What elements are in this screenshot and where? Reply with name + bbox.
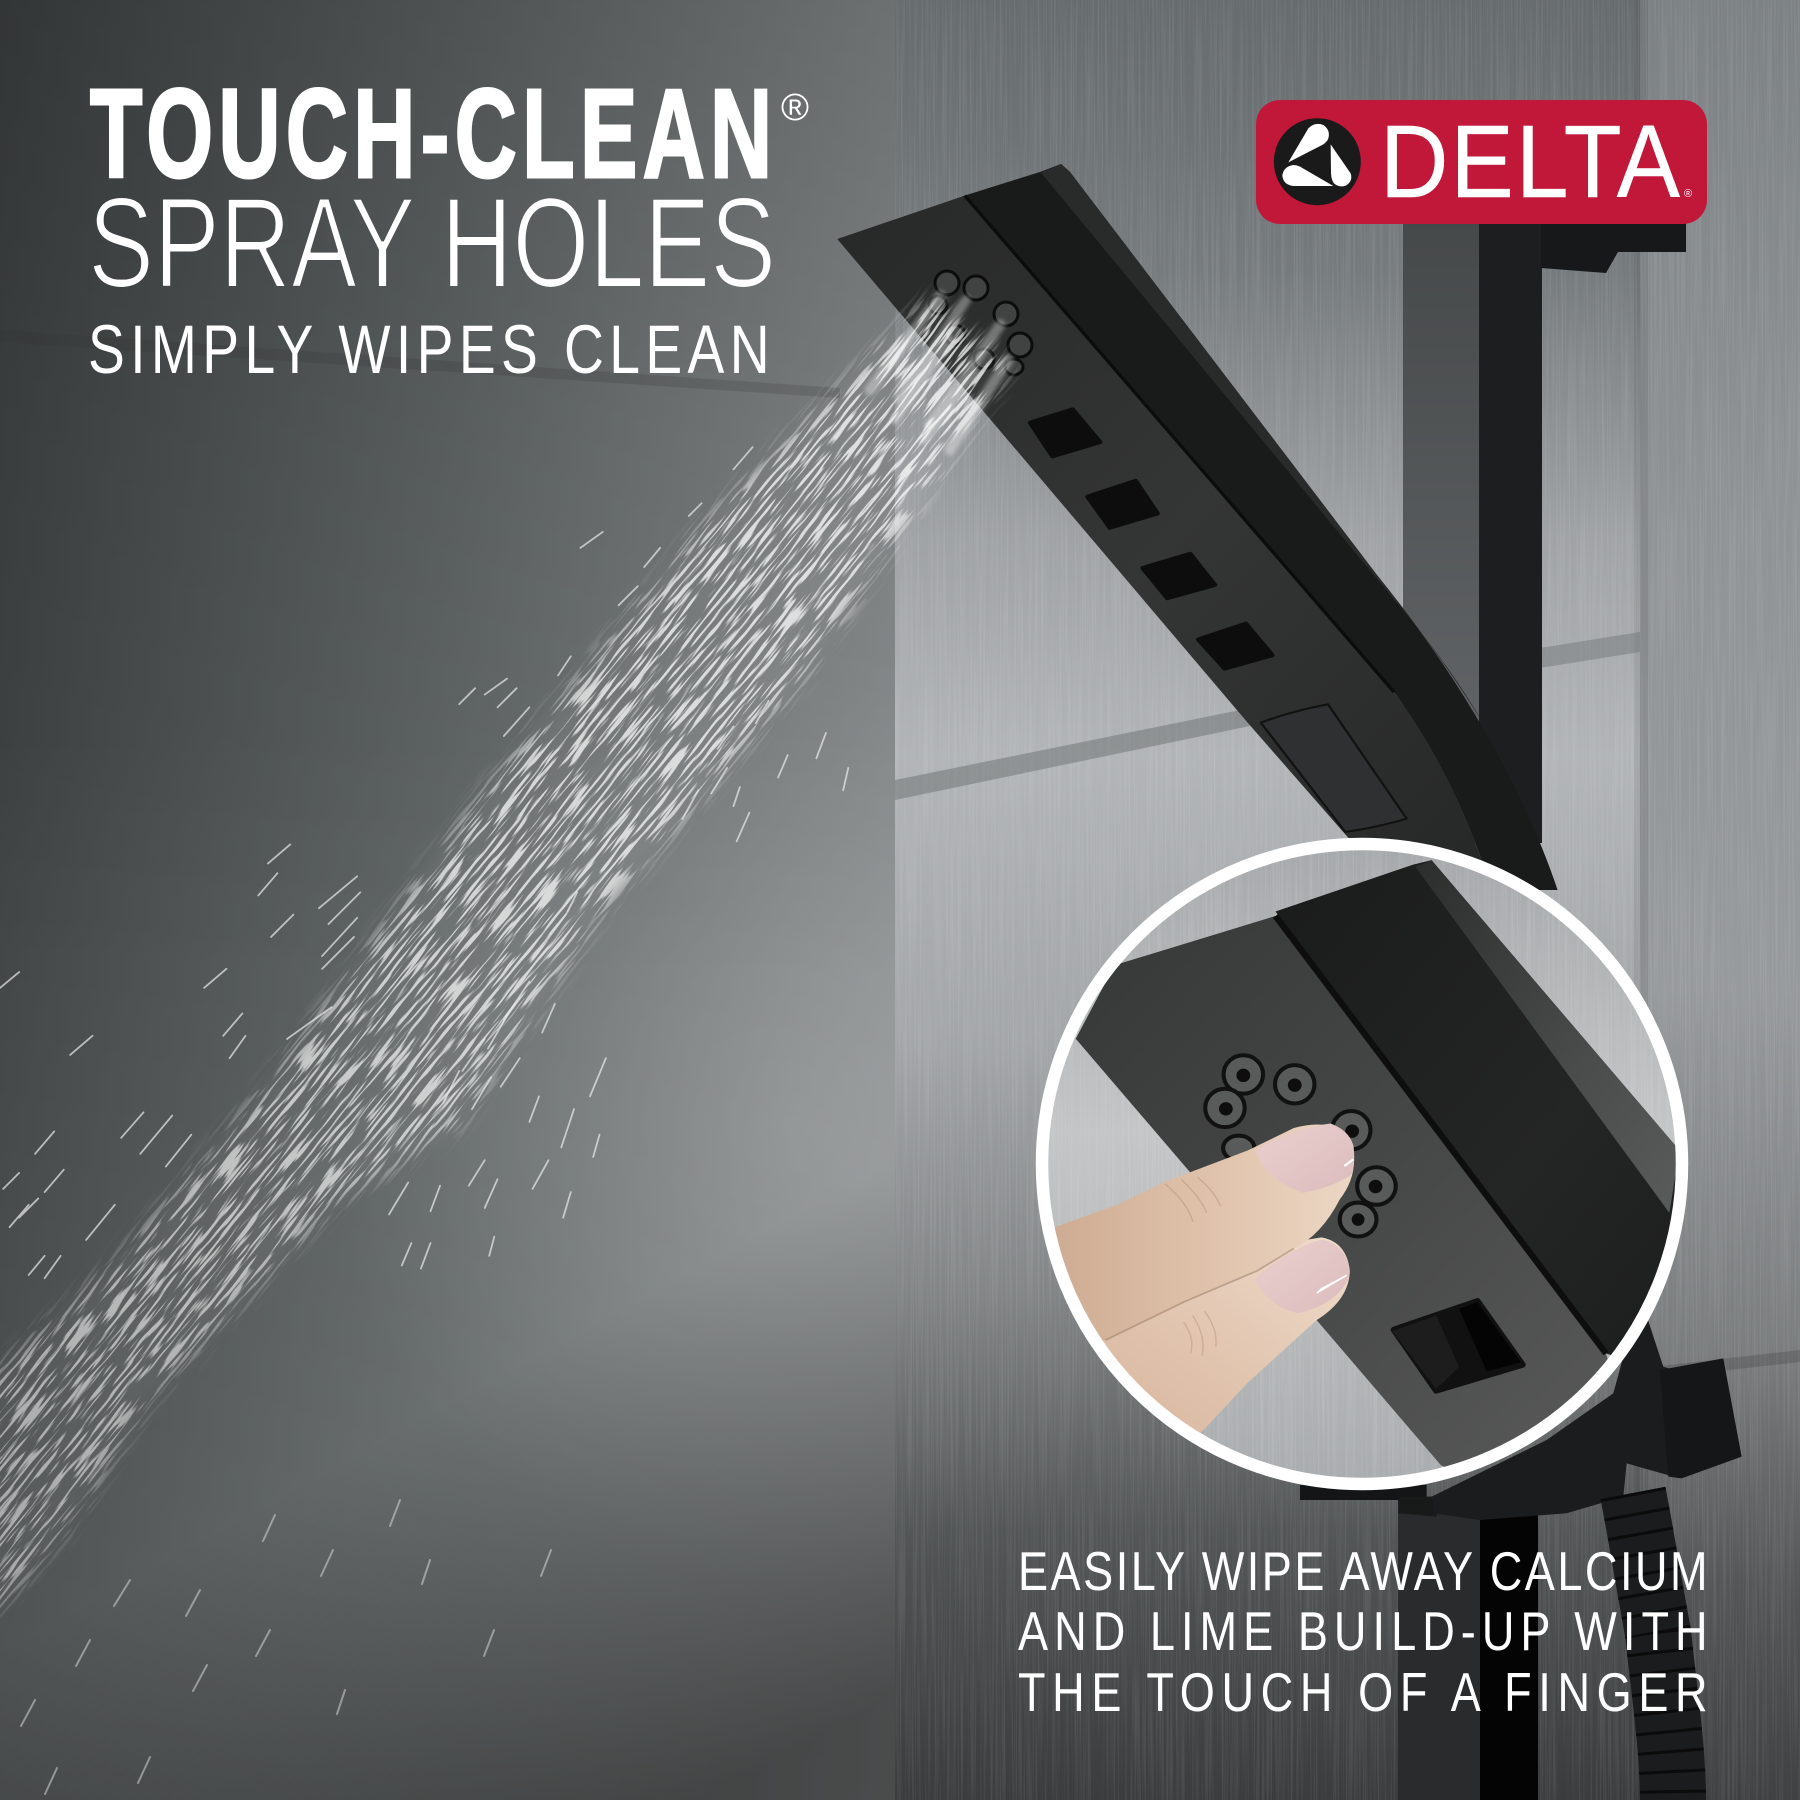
loose droplets [0, 447, 848, 1278]
metal hose [1633, 1493, 1673, 1800]
knuckle creases [1165, 1177, 1220, 1222]
logo circle [1274, 118, 1361, 205]
back strip [1415, 860, 1679, 1213]
title line: TOUCH-CLEAN: TOUCH-CLEAN [90, 62, 772, 204]
logo registered mark: ® [1684, 188, 1692, 200]
title line: SPRAY HOLES: SPRAY HOLES [88, 172, 776, 315]
soft mist [0, 298, 1010, 1640]
triangle mark [1282, 124, 1351, 186]
wall bracket [1541, 223, 1686, 273]
ring nozzles [1205, 1055, 1396, 1236]
shower hand unit [837, 164, 1558, 890]
body side [965, 164, 1558, 890]
nozzle head front face [1076, 916, 1620, 1499]
upper fingernail [1255, 1124, 1354, 1193]
upper finger [1028, 1124, 1354, 1356]
panel: right tiled wall [895, 0, 1800, 1800]
holder body [1432, 1320, 1673, 1520]
ridge groove [965, 196, 1394, 692]
ridge shadow [1275, 916, 1606, 1353]
front face [837, 196, 1492, 890]
hose holder [1300, 1320, 1742, 1520]
hose coil ridges [1633, 1493, 1673, 1800]
jet buttons [1030, 409, 1272, 669]
nail highlight [1344, 1159, 1354, 1166]
spray selector paddle [1261, 704, 1407, 832]
streaks [0, 289, 1018, 1618]
lower finger [1104, 1237, 1350, 1432]
lower fingernail [1255, 1240, 1350, 1313]
callout: zoomed fingertip circle [1028, 830, 1698, 1500]
back strip [1041, 164, 1486, 728]
ledge [1300, 1485, 1427, 1500]
caption [1018, 1540, 1708, 1723]
nozzle holes [1219, 1069, 1382, 1226]
spray nozzles on head [929, 271, 1032, 375]
jets leaving nozzles [870, 296, 1008, 450]
caption line 3: THE TOUCH OF A FINGER [1018, 1661, 1708, 1723]
wall clip block [1660, 1358, 1742, 1478]
logo badge: DELTA [1256, 100, 1707, 224]
nail highlight [1317, 1275, 1347, 1293]
knuckle creases [1184, 1311, 1216, 1356]
slide bar [1398, 223, 1542, 1800]
caption line 2: AND LIME BUILD-UP WITH [1018, 1600, 1708, 1662]
registered mark: ® [781, 87, 809, 129]
logo wordmark: DELTA [1380, 103, 1680, 219]
finger shadow [1106, 1249, 1294, 1340]
white circle ring [1042, 844, 1682, 1484]
panel: left background wall [0, 0, 897, 1800]
lower droplets [21, 1500, 551, 1794]
caption line 1: EASILY WIPE AWAY CALCIUM [1018, 1540, 1708, 1602]
water spray [0, 288, 1018, 1795]
title [88, 62, 809, 388]
ledge neck [1398, 1497, 1437, 1517]
nozzle head side face [1275, 860, 1698, 1365]
jet button [1393, 1301, 1522, 1390]
subtitle: SIMPLY WIPES CLEAN [88, 311, 770, 388]
